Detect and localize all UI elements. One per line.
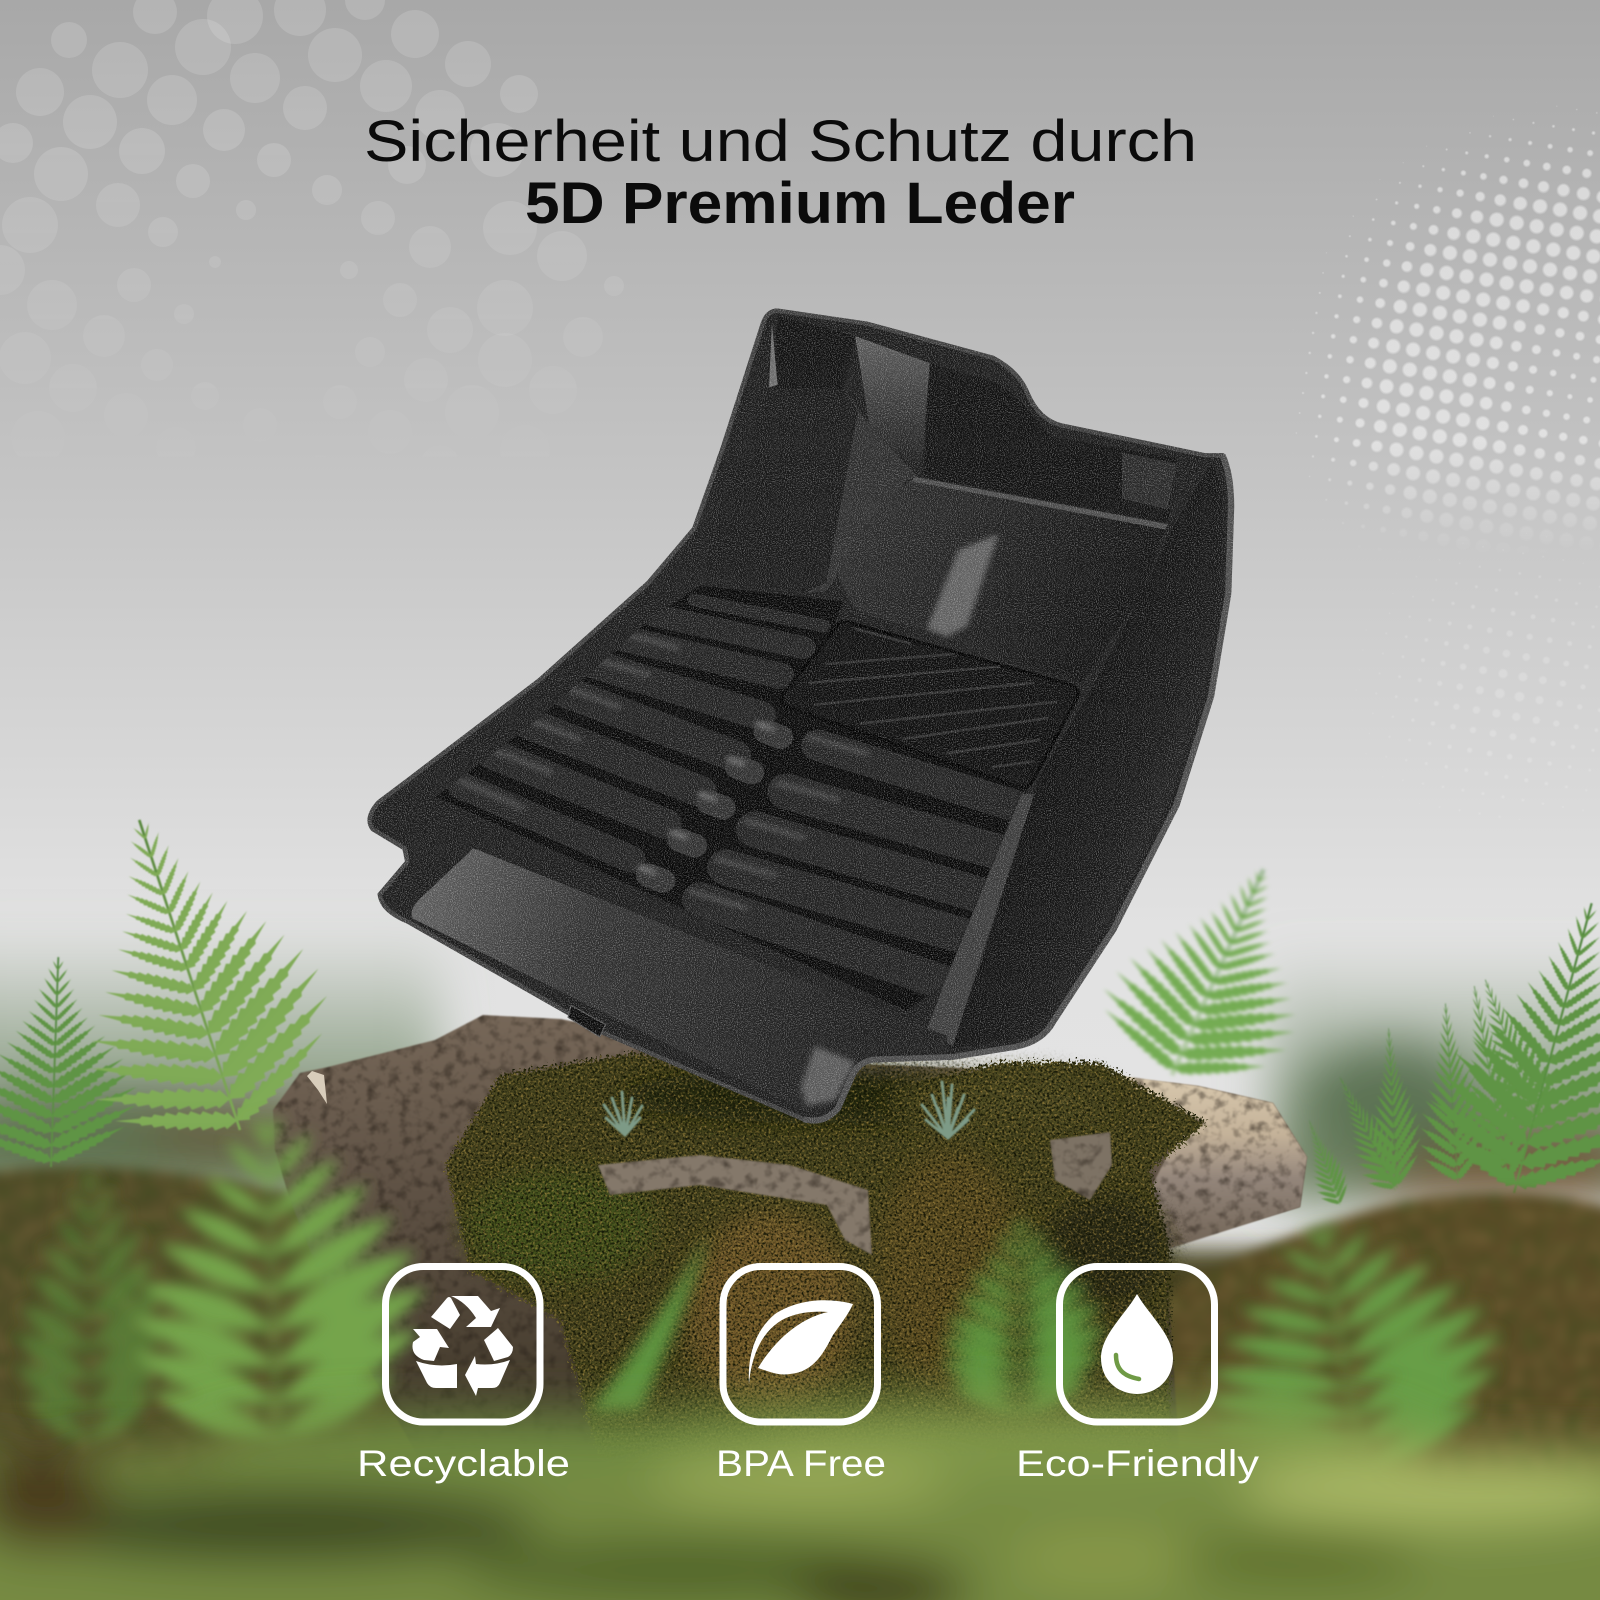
label: BPA Free: BPA Free bbox=[716, 1443, 886, 1484]
moss bbox=[445, 1052, 1206, 1460]
corner edge highlight bbox=[769, 323, 778, 388]
central ridge bbox=[855, 336, 930, 477]
ground mound right bbox=[1150, 1192, 1600, 1490]
title line 2: 5D Premium Leder bbox=[525, 171, 1075, 236]
grey stone in moss bbox=[1050, 1132, 1112, 1200]
rib highlights bbox=[459, 631, 867, 908]
back fern behind rock bbox=[1081, 829, 1354, 1115]
ferns on the right bbox=[1292, 875, 1600, 1221]
badge: BPA free bbox=[716, 1266, 886, 1484]
grass tufts bbox=[604, 1082, 974, 1138]
badge frame bbox=[386, 1266, 540, 1422]
blurred background foliage haze bbox=[0, 930, 1600, 1200]
light strip beside floor bbox=[927, 794, 1034, 1046]
label: Eco-Friendly: Eco-Friendly bbox=[1016, 1443, 1260, 1484]
side wall bbox=[950, 463, 1223, 1049]
right boulder bbox=[1091, 1072, 1307, 1250]
heel light streak bbox=[927, 534, 999, 637]
halftone dot pattern upper right bbox=[1296, 106, 1600, 522]
moss base bbox=[445, 1052, 1206, 1460]
halftone dot pattern lower right bbox=[1300, 500, 1600, 820]
rock bbox=[273, 1015, 1307, 1460]
binding clip bbox=[568, 1005, 605, 1037]
mat outline bbox=[370, 311, 1231, 1121]
floor mat product bbox=[370, 311, 1231, 1121]
binding edge lower right bbox=[803, 455, 1231, 1121]
upper right panel bbox=[924, 363, 1177, 523]
ferns on the left bbox=[0, 780, 364, 1171]
blurred foreground grass band bbox=[0, 1400, 1600, 1600]
ground base behind rock bbox=[0, 1250, 1600, 1500]
heel area bbox=[838, 481, 1165, 683]
badge frame bbox=[723, 1266, 878, 1422]
badge: recyclable bbox=[357, 1266, 570, 1484]
top left corner wall bbox=[772, 316, 855, 389]
icon: recycle arrows bbox=[412, 1296, 513, 1396]
anti-slip heel pad bbox=[781, 622, 1078, 788]
icon: water drop bbox=[1101, 1294, 1173, 1394]
label: Recyclable: Recyclable bbox=[357, 1443, 570, 1484]
bokeh circles top left bbox=[0, 0, 538, 206]
left ribs bbox=[462, 600, 824, 859]
badge: eco-friendly bbox=[1016, 1266, 1260, 1484]
footwell ridge bbox=[803, 389, 918, 594]
left wall panel bbox=[706, 388, 858, 594]
ribs clipped to well bbox=[459, 600, 1022, 984]
title line 1: Sicherheit und Schutz durch bbox=[364, 109, 1197, 174]
foreground blurred ferns bbox=[12, 1109, 1531, 1510]
right ribs bbox=[700, 745, 1022, 984]
pale chip on rock bbox=[307, 1071, 327, 1104]
upper ledge line bbox=[910, 477, 1168, 530]
upper right light patch bbox=[1122, 453, 1177, 510]
icon: leaf bbox=[749, 1300, 853, 1384]
stone ledge bbox=[598, 1155, 872, 1255]
title bbox=[364, 109, 1197, 236]
floor well bbox=[436, 585, 1027, 1011]
centre pads bbox=[648, 732, 780, 881]
heel ramp highlight bbox=[801, 1046, 855, 1106]
badge frame bbox=[1060, 1266, 1214, 1422]
moss colour patches bbox=[465, 1067, 1167, 1410]
front panel bbox=[412, 848, 947, 1113]
ground mound left bbox=[0, 1166, 520, 1500]
